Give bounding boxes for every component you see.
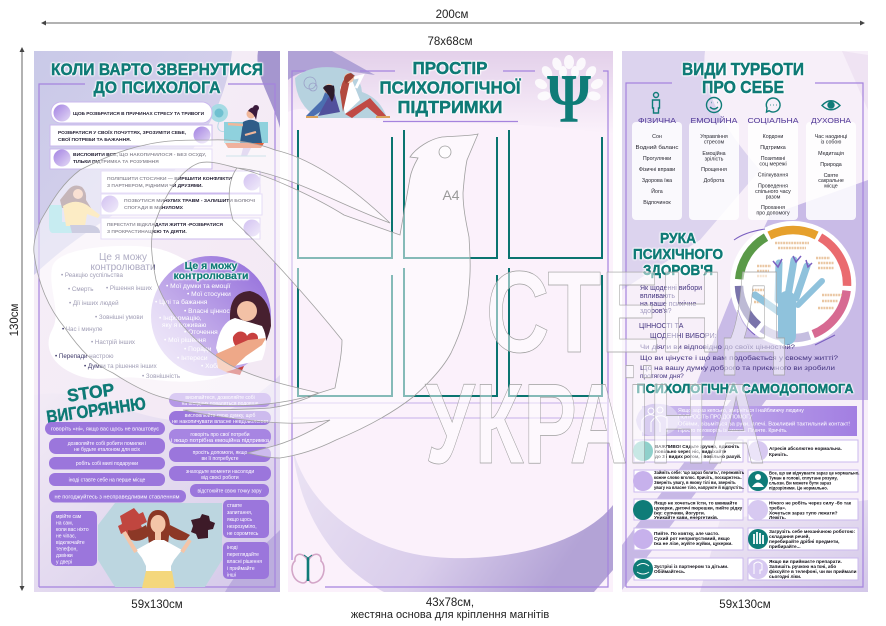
caption: left panel size: 59х130см <box>131 599 183 611</box>
burnout tips: right pills: від своєї роботи <box>201 475 239 481</box>
magnetic A4 pockets <box>298 130 602 396</box>
tip card: mechanical work: Загрузіть себе механічною роботою: <box>769 528 855 534</box>
burnout tip: ask questions box: запитання, <box>227 510 252 516</box>
icon: psi with tree: Ψ <box>547 61 591 138</box>
heading: ПРО СЕБЕ <box>702 77 784 97</box>
text: questions about daily choices: впливають <box>640 293 675 300</box>
panel: when to see a psychologist <box>34 51 280 592</box>
icon: hand <box>755 260 822 336</box>
illustration: seated woman <box>49 186 100 233</box>
reason 4: З ПАРТНЕРОМ, РІДНИМИ ЧИ ДРУЗЯМИ. <box>107 183 203 189</box>
blob: what I cannot control: • Дії інших людей <box>69 300 119 307</box>
burnout tip: ask questions box: якщо щось <box>227 517 252 523</box>
circle: what I can control: • Інформацію, <box>159 314 202 322</box>
blob: what I cannot control: • Думки та рішення інших <box>84 363 158 370</box>
column: physical: Йога <box>651 187 663 195</box>
blob: what I cannot control: • Настрій інших <box>91 339 136 346</box>
tip card: medication: сьогодні ліки. <box>769 574 801 579</box>
tip card: do nothing: Нічого не робіть через силу -бо так <box>769 500 852 506</box>
column: physical: Фізичні вправи <box>639 167 675 173</box>
column: physical: ФІЗИЧНА <box>638 116 677 125</box>
burnout tips: left pills: говоріть «ні», якщо вас щось не влаштовує <box>51 426 159 432</box>
panel: space of psychological support <box>288 51 613 592</box>
text: questions about daily choices: Як щоденні вибори <box>640 284 702 292</box>
tip card: eating <box>633 499 743 520</box>
reason 2 <box>50 125 212 146</box>
tip card: take yourself: кожне слово вголос. Кричіть, поскаржтесь. <box>654 475 742 480</box>
column: social: Спілкування <box>758 172 788 178</box>
heading: ПСИХОЛОГІЧНОЇ <box>380 78 522 98</box>
heading <box>682 59 804 97</box>
column: social: Позитивні <box>761 156 785 162</box>
blob: what I cannot control: Це я можу <box>99 252 147 263</box>
reason 6 <box>101 218 260 239</box>
column: emotional: Доброта <box>704 178 724 184</box>
icon: butterfly <box>292 554 324 583</box>
column: physical: Здорова їжа <box>642 178 672 184</box>
tip card: take yourself: Зверніть увагу, в якому тілі ви, зверніть <box>654 480 736 485</box>
tip card: breathing <box>633 440 743 462</box>
tip card: eating: Уникайте кави, енергетиків. <box>654 514 718 520</box>
circle: what I can control: • Поради <box>184 346 212 353</box>
dimension: centre panel upper: 78х68см <box>428 36 473 48</box>
column: social: спільного часу <box>755 189 791 195</box>
text: questions about daily choices: Чи діяли ви відповідно до своїх цінностей? <box>640 343 795 351</box>
illustration: woman at screen <box>210 104 268 156</box>
reason 2: СВОЇ ПОТРЕБИ ТА БАЖАННЯ. <box>58 136 132 143</box>
heading: hand of mental health: ЗДОРОВ'Я <box>643 262 713 279</box>
burnout tip: review decisions box: переглядайте <box>227 551 259 558</box>
circle: what I can control: • Мої рішення <box>164 336 206 344</box>
reason 1: ЩОБ РОЗІБРАТИСЯ В ПРИЧИНАХ СТРЕСУ ТА ТРИВОГИ <box>73 111 204 117</box>
circle: what I can control: яку я поживаю <box>162 322 206 329</box>
heading: ВИДИ ТУРБОТИ <box>682 59 804 79</box>
label: A4: А4 <box>442 187 460 203</box>
burnout tip: ask questions box <box>223 500 269 538</box>
heading: psychological self-help: ПСИХОЛОГІЧНА САМОДОПОМОГА <box>636 381 854 396</box>
heading: hand of mental health <box>633 230 723 279</box>
reason 5: СПОГАДИ В МИНУЛОМУ. <box>124 205 184 211</box>
burnout tip: daydream box <box>51 511 97 566</box>
column: physical: Прогулянки <box>643 156 671 162</box>
heading: hand of mental health: РУКА <box>660 230 696 247</box>
tip card: do nothing: Лежіть. <box>769 515 786 520</box>
blob: what I cannot control: • Час і минуле <box>62 326 103 333</box>
burnout tip: ask questions box: ставте <box>227 503 242 509</box>
burnout tip: review decisions box: власні рішення <box>227 559 262 565</box>
reason 1 <box>51 102 212 123</box>
text: questions about daily choices: Що на вашу думку доброго та приємного ви зробили <box>640 364 835 372</box>
tip card: normal: сльози. Ви можете бути зараз <box>769 480 831 486</box>
column: social: Проведення <box>758 184 788 190</box>
blob: what I cannot control: • Смерть <box>68 286 93 293</box>
column: social: про допомогу <box>756 210 790 216</box>
icon: speech bubble <box>766 98 780 112</box>
tip card: medication: Якщо ви приймаєте препарати. <box>769 558 842 564</box>
column: physical <box>632 92 682 220</box>
tip card: aggression: Кричіть. <box>769 452 788 457</box>
reason 5 <box>101 194 262 215</box>
caption: right panel size: 59х130см <box>719 599 771 611</box>
tip card: aggression <box>748 440 858 462</box>
tip card: mechanical work <box>748 528 858 550</box>
column: spiritual: сакральне <box>818 178 844 184</box>
burnout tip: daydream box: телефон, <box>56 546 78 552</box>
tip card: hugs: Обіймайтесь. <box>654 568 685 574</box>
column: social: Прохання <box>761 205 785 211</box>
burnout tip: review decisions box: інші <box>227 572 236 578</box>
reason 4: ПОЛІПШИТИ СТОСУНКИ — ВИРІШИТИ КОНФЛІКТИ <box>107 176 232 182</box>
reason 5: ПОЗБУТИСЯ МИНУЛИХ ТРАВМ - ЗАЛИШИТИ БОЛЮЧІ <box>124 198 256 204</box>
illustration: woman with puzzle pieces <box>98 503 222 588</box>
tip card: breathing: ВАЖЛИВО! Сядьте зручно, вдихніть <box>655 444 740 449</box>
burnout tip: daydream box: не чіпає, <box>56 534 76 540</box>
circle: what I can control: Це я можу <box>185 260 238 272</box>
tip card: drinking: їжа не лізе, жуйте жуйки, цукерки. <box>653 540 733 546</box>
tip card: drinking <box>633 528 743 550</box>
reason 3: ВИСЛОВИТИ ВСЕ, ЩО НАКОПИЧИЛОСЯ - БЕЗ ОСУДУ, <box>73 152 207 158</box>
caption: centre panel size: жестяна основа для кріплення магнітів <box>351 609 549 621</box>
heading <box>380 58 522 117</box>
blob: what I cannot control: контролювати <box>90 262 156 273</box>
blob: what I cannot control: • Зовнішність <box>142 373 180 380</box>
burnout tip: review decisions box <box>223 542 269 579</box>
column: emotional: Прощення <box>701 167 727 173</box>
burnout tip: review decisions box: іноді <box>227 545 238 551</box>
column: spiritual <box>806 101 856 220</box>
column: social: соц мережі <box>759 162 787 168</box>
column: physical: Відпочинок <box>643 200 671 206</box>
text: questions about daily choices <box>639 284 838 380</box>
tip card: do nothing: треба». <box>769 504 786 510</box>
banner: ask for help: Якщо зараз кепсько, зверніться і найближчу людину <box>678 407 804 414</box>
burnout tips: left pills: дозволяйте собі робити помилки і <box>68 440 146 447</box>
banner: ask for help <box>636 404 857 436</box>
burnout tip: ask questions box: незрозуміло, <box>227 524 257 530</box>
heading: ПІДТРИМКИ <box>398 97 502 117</box>
illustration: two seated people <box>295 67 390 118</box>
tip card: breathing: до 3 і видих ротом, і повільно рахуй. <box>655 453 741 459</box>
column: emotional: стресом <box>704 140 724 146</box>
banner: ask for help: Обійми, візьміться за руки, плечі. Важливий тактильний контакт! <box>678 420 850 428</box>
burnout tips: right pills: висловлюйте свою думку, щоб <box>185 412 255 419</box>
column: emotional: Управління <box>700 134 728 140</box>
column: spiritual: Святе <box>824 173 838 179</box>
column: social: Кордони <box>763 134 783 140</box>
dimension: total width: 200см <box>436 9 469 21</box>
tip card: mechanical work: прибирайте... <box>769 543 801 549</box>
column: spiritual: Медитація <box>818 151 844 157</box>
caption: centre panel size <box>351 597 549 621</box>
burnout tips: left pills: іноді ставте себе на перше місце <box>69 478 146 484</box>
tip card: hugs <box>633 558 743 580</box>
reason 6: ПЕРЕСТАТИ ВІДКЛАДАТИ ЖИТТЯ -РОЗІБРАТИСЯ <box>107 222 223 228</box>
column: spiritual: Час наодинці <box>815 134 847 140</box>
panel: kinds of self care <box>622 51 868 592</box>
burnout tip: daydream box: мрійте сам <box>56 513 82 520</box>
burnout tip: ask questions box: не соромтесь <box>227 531 259 537</box>
reason 6: З ПРОКРАСТИНАЦІЄЮ ТА ДІЯТИ. <box>107 229 187 235</box>
reason 4 <box>101 171 260 193</box>
heading: КОЛИ ВАРТО ЗВЕРНУТИСЯ <box>51 60 263 79</box>
icon: smile <box>706 98 722 112</box>
tip card: normal: Туман в голові, сплутане розуму, <box>769 476 838 480</box>
circle: what I can control: • Мої стосунки <box>187 291 231 298</box>
tip card: normal: підозрілими. Це нормально. <box>769 486 828 490</box>
burnout tips: right pills: висипайтеся, дозволяйте собі <box>185 394 255 401</box>
tip card: normal <box>748 470 859 492</box>
watermark: brand text <box>425 247 786 488</box>
tip card: medication: Запишіть ручкою на їхні, або <box>769 563 836 569</box>
column: physical: Водний баланс <box>636 144 679 151</box>
text: questions about daily choices: ЦІННОСТІ ТА <box>639 323 684 330</box>
burnout tip: daydream box: на сам, <box>56 520 73 526</box>
circle: what I can control: • Мої думки та емоції <box>166 282 231 290</box>
heading: ПРОСТІР <box>412 58 488 78</box>
tip card: take yourself <box>633 470 745 492</box>
tip card: mechanical work: перебирайте дрібні предмети, <box>769 538 839 544</box>
illustration: woman hugging herself <box>216 291 271 375</box>
heading: stop burnout: STOP <box>66 379 116 406</box>
blob: what I cannot control <box>49 246 225 382</box>
column: physical: Сон <box>652 134 662 140</box>
circle: what I can control: • Власні цінності <box>184 307 235 315</box>
circle: what I can control: • Хобі <box>201 362 219 370</box>
tip card: breathing: повільно через ніс, видихайте <box>655 448 727 454</box>
banner: ask for help: ПОПРОСІТЬ ПРО ДОПОМОГУ <box>678 414 753 420</box>
burnout tips: right pills <box>169 393 271 497</box>
heading <box>51 60 263 97</box>
tip card: take yourself: Займіть себе: 'що зараз болить', переживіть <box>654 470 745 475</box>
burnout tip: daydream box: коли вас ніхто <box>56 527 89 533</box>
burnout tips: right pills: не накопичувати власне невдоволення <box>172 419 268 425</box>
heading: ДО ПСИХОЛОГА <box>94 78 220 97</box>
burnout tips: right pills: ви її потребуєте <box>202 456 239 462</box>
text: questions about daily choices: на ваше психічне <box>640 300 696 308</box>
burnout tips: right pills: і якщо потрібна емоційна підтримка <box>171 437 269 444</box>
burnout tip: daydream box: дзвінки <box>56 553 73 559</box>
column: emotional: ЕМОЦІЙНА <box>690 116 739 125</box>
blob: what I cannot control: • Реакцію суспільства <box>61 272 124 279</box>
diagram: hand wheel <box>730 221 856 347</box>
burnout tips: right pills: відстоюйте свою точку зору <box>197 488 262 494</box>
dimension: height: 130см <box>9 303 21 336</box>
dimension: total width <box>41 9 865 26</box>
circle: what I can control: • Оточення <box>184 329 218 336</box>
tip card: medication <box>748 558 858 580</box>
circle: what I can control <box>151 256 271 376</box>
circle: what I can control: • Інтереси <box>177 355 208 362</box>
column: emotional <box>689 98 739 220</box>
text: questions about daily choices: ЩОДЕННІ ВИБОРИ: <box>650 333 717 340</box>
tip card: medication: фіксуйте в телефоні, чи ви приймали <box>769 568 857 574</box>
heading: hand of mental health: ПСИХІЧНОГО <box>633 246 723 263</box>
burnout tips: right pills: говоріть про свої потреби <box>190 432 250 438</box>
tip card: drinking: Пийте. По ковтку, але часто. <box>654 530 719 536</box>
heading: stop burnout: ВИГОРЯННЮ <box>45 393 147 427</box>
burnout tips: left pills <box>45 422 186 502</box>
blob: what I cannot control: • Зовнішні умови <box>95 314 144 321</box>
tip card: do nothing <box>748 499 858 520</box>
tip card: take yourself: увагу на власне тіло, напружте й відпустіть. <box>654 485 744 490</box>
column: spiritual: місце <box>824 184 838 190</box>
burnout tips: left pills: не погоджуйтесь з несправедливим ставленням <box>54 494 180 500</box>
column: social: Підтримка <box>760 145 786 151</box>
burnout tip: review decisions box: і приймайте <box>227 565 255 572</box>
column: social: разом <box>766 194 781 200</box>
burnout tips: right pills: просіть допомоги, якщо <box>193 450 248 456</box>
icon: person <box>652 92 660 113</box>
burnout tips: left pills: робіть собі милі подарунки <box>76 461 138 467</box>
icon: eye <box>822 101 840 110</box>
reason 3 <box>50 149 212 169</box>
heading: stop burnout <box>43 375 147 427</box>
column: spiritual: із собою <box>821 140 841 146</box>
tip card: do nothing: Хочеться зараз тупо лежати? <box>769 510 838 516</box>
column: emotional: Емоційна <box>702 150 726 157</box>
burnout tip: daydream box: у двері <box>56 560 72 566</box>
blob: what I cannot control: • Рішення інших <box>106 285 153 292</box>
banner: ask for help: Просто поговоріть із кимось. Плачте. Кричіть. <box>678 428 788 434</box>
blob: what I cannot control: • Перепади настрою <box>55 353 114 360</box>
text: questions about daily choices: протягом дня? <box>640 373 684 380</box>
column: spiritual: Природа <box>820 162 842 168</box>
tip card: aggression: Агресія абсолютно нормальна. <box>769 445 842 451</box>
watermark: brand text: СТЕНД <box>486 247 786 377</box>
dimension: height <box>9 47 24 591</box>
tip card: eating: Якщо не хочеться їсти, то вживайте <box>654 500 738 506</box>
column: social: СОЦІАЛЬНА <box>748 116 800 125</box>
circle: what I can control: • Цілі та бажання <box>155 298 208 306</box>
column: emotional: зрілість <box>705 156 724 162</box>
burnout tips: right pills: знаходьте моменти насолоди <box>186 469 254 475</box>
column: spiritual: ДУХОВНА <box>811 116 852 125</box>
tip card: eating: цукерки, дитячі пюрешки, пийте рідку <box>654 504 743 510</box>
burnout tips: left pills: не будьте еталоном для всіх <box>74 447 140 453</box>
tip card: mechanical work: складання речей, <box>769 533 810 539</box>
burnout tip: daydream box: відключайте <box>56 539 85 546</box>
tip card: eating: їжу: супчики, йогурти. <box>653 510 705 516</box>
tip card: normal: Все, що ви відчуваєте зараз це нормально. <box>769 470 859 476</box>
reason 2: РОЗІБРАТИСЯ У СВОЇХ ПОЧУТТЯХ, ЗРОЗУМІТИ СЕБЕ, <box>58 129 187 136</box>
reason 3: ТІЛЬКИ ПІДТРИМКА ТА РОЗУМІННЯ <box>73 159 159 165</box>
watermark: bird outline <box>34 134 478 458</box>
text: questions about daily choices: здоров'я? <box>640 308 672 315</box>
tip card: drinking: Сухий рот неприпустимий, якщо <box>654 535 730 541</box>
caption: centre panel size: 43х78см, <box>426 597 474 609</box>
text: questions about daily choices: Що ви цінуєте і що вам подобається у своєму житті? <box>640 354 838 362</box>
tip card: hugs: Зустрічі із партнером та дітьми. <box>654 564 728 569</box>
burnout tips: right pills: на вихідних поваляться подовше <box>182 401 259 407</box>
column: social <box>748 98 800 220</box>
circle: what I can control: контролювати <box>174 270 248 282</box>
